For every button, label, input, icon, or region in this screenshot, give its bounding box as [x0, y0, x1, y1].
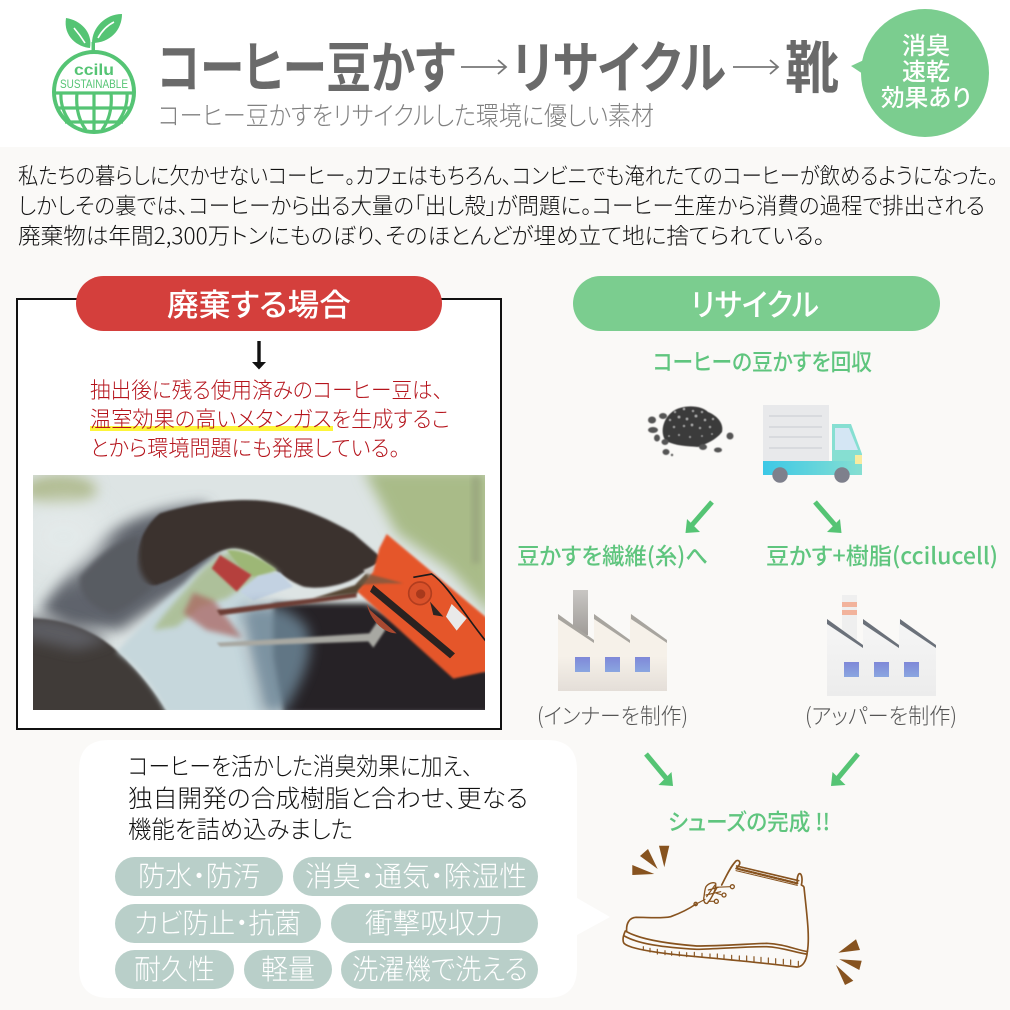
badge text: [881, 33, 971, 112]
title: コーヒー豆かす: [157, 37, 455, 100]
badge text: 消臭: [902, 33, 950, 60]
icon: factory grey: [827, 595, 936, 696]
feature tag: deodorant: 消臭・通気・除湿性: [305, 861, 527, 892]
label: make upper: (アッパーを制作): [805, 699, 957, 731]
icon: shoe illustration: [623, 860, 808, 967]
step label: collect grounds: コーヒーの豆かすを回収: [653, 343, 872, 377]
icon: ccilu sustainable logo: [54, 14, 134, 132]
arrow: down-right to shoe: [646, 754, 673, 786]
logo globe grid: [55, 93, 133, 132]
heading pill: disposal: [76, 276, 442, 331]
feature tag: washable: 洗濯機で洗える: [352, 954, 528, 985]
panel: disposal case: [17, 276, 501, 729]
red explanatory text: [90, 378, 450, 461]
title: リサイクル: [512, 37, 726, 100]
arrow: down-right to resin: [815, 502, 842, 533]
intro text block: しかしその裏では、コーヒーから出る大量の「出し殻」が問題に。コーヒー生産から消費の過程で排出される: [18, 189, 985, 221]
icon: factory beige: [558, 590, 667, 691]
feature description text: [128, 753, 528, 844]
feature description text: 独自開発の合成樹脂と合わせ、更なる: [128, 785, 528, 813]
feature description text: コーヒーを活かした消臭効果に加え、: [128, 753, 473, 781]
red explanatory text: とから環境問題にも発展している。: [90, 436, 400, 461]
icon: coffee grounds pile: [648, 406, 734, 456]
feature tag: waterproof: 防水・防汚: [138, 861, 260, 892]
feature tag: shock absorption: 衝撃吸収力: [365, 908, 503, 939]
red explanatory text: 抽出後に残る使用済みのコーヒー豆は、: [90, 378, 443, 403]
highlight: yellow underline: [90, 426, 333, 431]
step label: shoes complete: シューズの完成 !!: [668, 803, 830, 837]
heading pill: disposal: 廃棄する場合: [167, 288, 351, 323]
feature tag: durability: 耐久性: [134, 954, 215, 985]
photo: composting machine with steam: [20, 470, 493, 713]
feature tag: antibacterial: [115, 904, 321, 943]
intro text block: [18, 159, 998, 251]
title: [157, 37, 839, 100]
heading pill: recycle: リサイクル: [691, 288, 819, 323]
header background: [0, 0, 1010, 147]
subtitle: コーヒー豆かすをリサイクルした環境に優しい素材: [158, 101, 654, 131]
feature tag: durability: [115, 950, 234, 989]
heading pill: recycle: [573, 276, 940, 331]
step label: into fiber: 豆かすを繊維(糸)へ: [517, 537, 708, 571]
badge: deodorant quick dry: [851, 9, 989, 137]
arrow: down black: [252, 341, 266, 370]
badge text: 効果あり: [881, 85, 971, 112]
icon: sparkle marks bottom right: [836, 939, 862, 985]
step label: resin: 豆かす+樹脂(ccilucell): [766, 537, 998, 571]
feature tag: lightweight: [244, 950, 332, 989]
icon: logo leaves: [66, 14, 122, 52]
title: 靴: [785, 37, 839, 100]
panel: feature speech bubble: [79, 740, 610, 998]
arrow: down-left to shoe: [831, 754, 858, 786]
feature tag: shock absorption: [331, 904, 538, 943]
arrow: down-left to fiber: [686, 502, 712, 533]
badge text: 速乾: [902, 59, 950, 86]
feature description text: 機能を詰め込みました: [128, 816, 353, 844]
logo brand text: ccilu: [74, 62, 114, 79]
red explanatory text: 温室効果の高いメタンガスを生成するこ: [90, 407, 450, 432]
icon: sparkle marks top left: [632, 846, 669, 875]
intro text block: 廃棄物は年間2,300万トンにものぼり、そのほとんどが埋め立て地に捨てられている。: [18, 219, 825, 251]
feature tag: lightweight: 軽量: [261, 954, 315, 985]
feature tag: antibacterial: カビ防止・抗菌: [134, 908, 301, 939]
icon: delivery truck: [763, 405, 862, 483]
feature tag: waterproof: [115, 857, 283, 896]
logo sustainable text: SUSTAINABLE: [60, 77, 128, 91]
label: make inner: (インナーを制作): [537, 699, 688, 731]
